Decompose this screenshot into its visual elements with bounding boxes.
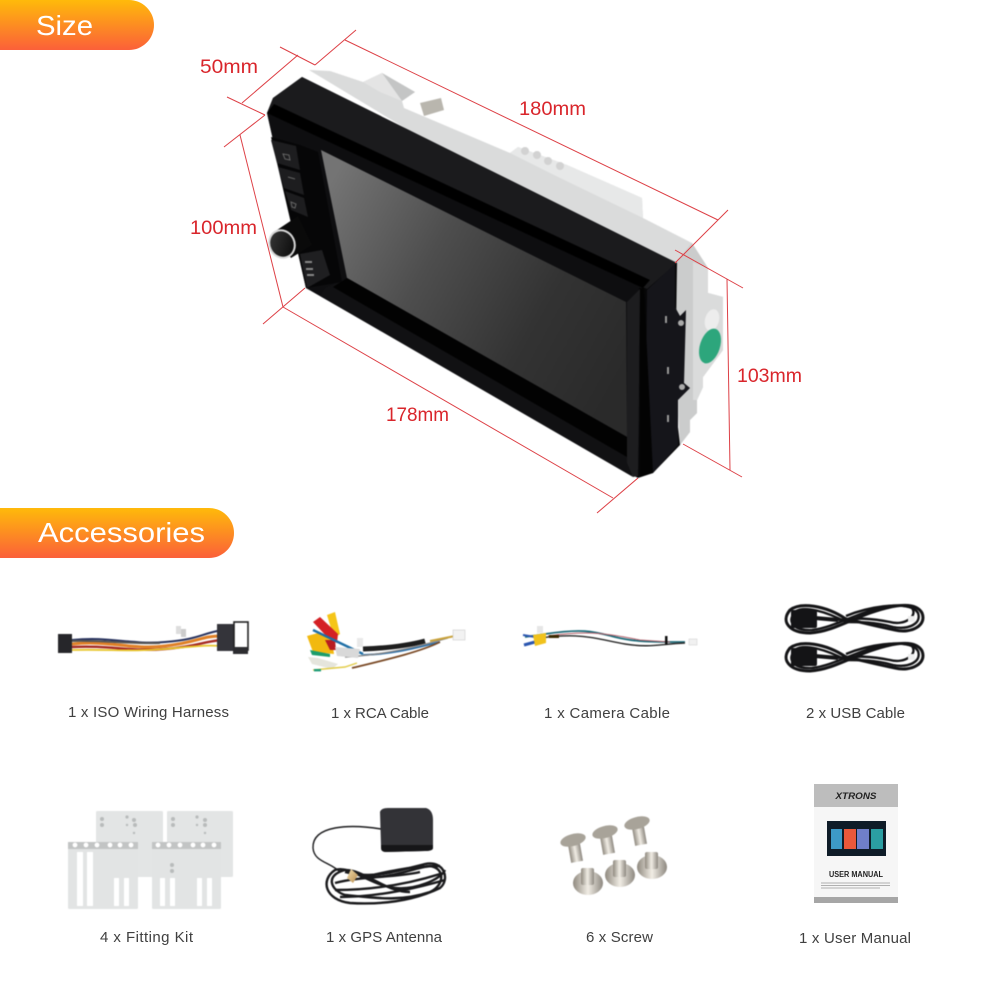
label: GPS antenna: 1 x GPS Antenna [326, 929, 443, 946]
dimension lines [224, 30, 743, 513]
heading: Size: Size [36, 10, 93, 41]
accessory: GPS antenna [313, 808, 445, 903]
lower bezel under screen [320, 278, 633, 477]
button column [271, 137, 342, 288]
dimension label: 50mm: 50mm [200, 57, 258, 78]
right side black panel with notches [645, 264, 690, 473]
black band below screen [333, 278, 627, 457]
accessory: RCA cable [307, 612, 465, 671]
lower USB cable [786, 643, 923, 671]
accessory: USB cables [786, 605, 923, 671]
accessory: user manual: USER MANUAL [829, 870, 883, 879]
screen [321, 150, 627, 437]
label: RCA cable: 1 x RCA Cable [331, 705, 429, 722]
dimension label: 178mm: 178mm [386, 405, 449, 426]
accessory: camera cable [523, 626, 697, 646]
accessory: ISO wiring harness [58, 622, 248, 654]
top row screws [559, 814, 651, 863]
label: USB cable: 2 x USB Cable [806, 705, 905, 722]
label: ISO wiring harness: 1 x ISO Wiring Harness [68, 704, 229, 721]
front face of frame [267, 113, 643, 478]
heading: Accessories [0, 508, 234, 558]
label: screws: 6 x Screw [586, 929, 653, 946]
right screen bezel [627, 289, 640, 477]
accessory: screws [559, 814, 667, 895]
dimension label: 180mm: 180mm [519, 99, 586, 120]
bottom row screws [573, 852, 667, 895]
product: head unit [265, 70, 725, 478]
heading: Accessories: Accessories [38, 517, 205, 548]
upper USB cable [786, 605, 923, 633]
accessory: user manual [814, 784, 898, 903]
volume knob [265, 216, 312, 262]
label: fitting kit: 4 x Fitting Kit [100, 929, 194, 946]
accessory: user manual: XTRONS [834, 791, 876, 801]
accessory: fitting kit [68, 811, 233, 909]
dimension label: 100mm: 100mm [190, 218, 257, 239]
heading: Size [0, 0, 154, 50]
label: camera cable: 1 x Camera Cable [544, 705, 670, 722]
dimension label: 103mm: 103mm [737, 366, 802, 387]
CE mark label [702, 308, 722, 332]
green round label [695, 326, 725, 366]
black underlay [267, 77, 680, 478]
rear silver chassis with tabs [309, 70, 723, 445]
label: user manual: 1 x User Manual [799, 930, 911, 947]
top face of frame [267, 77, 677, 289]
